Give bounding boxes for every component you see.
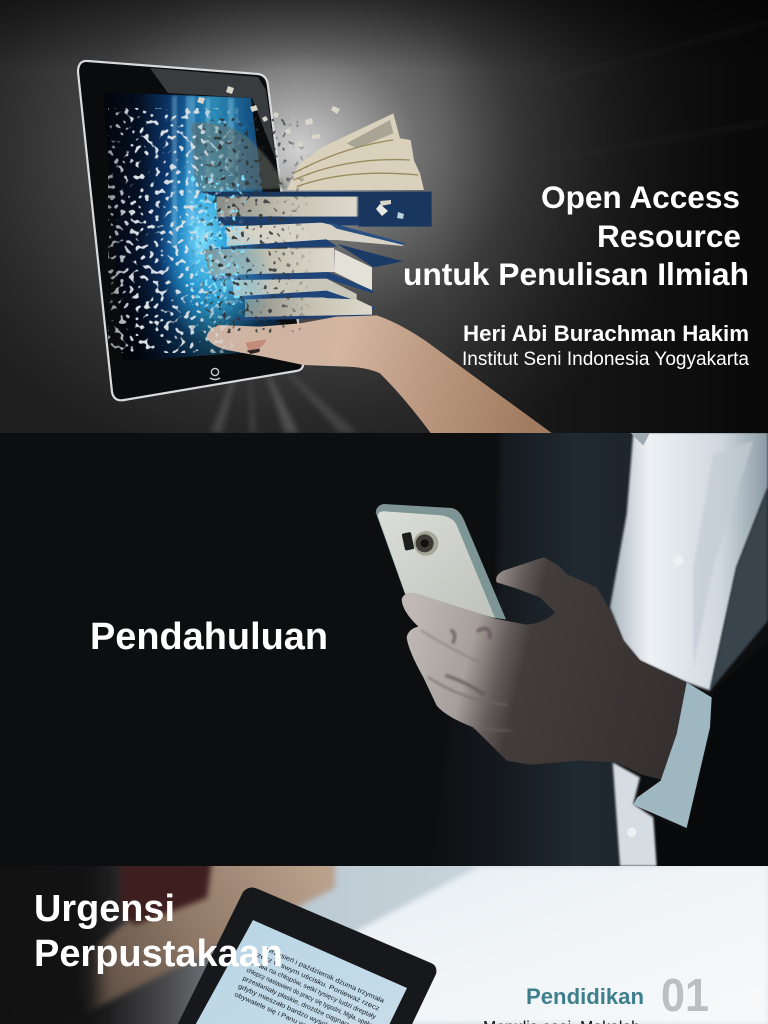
reader text: [233, 942, 385, 1024]
home button: [210, 368, 220, 380]
shirt lower: [613, 762, 657, 866]
shirt buttons: [627, 556, 683, 837]
title: Resource: [597, 218, 741, 254]
reader text: działa na chłopów, setki tysięcy ludzi dreptały: [250, 959, 377, 1021]
white desk surface: [330, 866, 768, 1024]
collar: [630, 432, 650, 446]
book two: [227, 223, 403, 246]
data particles: cyan: [190, 175, 245, 305]
left dark shadow: [0, 856, 98, 1024]
panel: pendahuluan slide: [0, 427, 768, 874]
photo: man with phone: [376, 427, 768, 874]
background: blurred desk: [0, 866, 768, 1024]
shirt fold: [693, 441, 753, 667]
heading: Urgensi: [34, 888, 175, 930]
tablet body: [78, 61, 303, 400]
title: [404, 186, 748, 286]
heading: [34, 888, 283, 975]
data particles: light: [108, 108, 248, 353]
camera: [402, 532, 414, 551]
title: untuk Penulisan Ilmiah: [403, 256, 749, 292]
reader text: wrzesień i październik dżuma trzymała: [264, 946, 385, 1005]
number: 01: [661, 969, 709, 1021]
hand and arm: [207, 315, 557, 437]
category label: Pendidikan: [526, 984, 644, 1009]
screen shading: [119, 94, 279, 361]
title: Open Access: [541, 179, 740, 215]
author institution: Institut Seni Indonesia Yogyakarta: [462, 349, 749, 370]
left pages dissolving: [192, 122, 287, 192]
finger shading: [422, 628, 510, 731]
jacket and tie: [472, 433, 634, 866]
open book: [192, 113, 424, 192]
phone: [376, 504, 506, 619]
book four: [210, 272, 373, 293]
shirt upper: [610, 432, 768, 691]
shirt cuff: [633, 682, 712, 828]
panel: urgensi perpustakaan slide: [0, 856, 768, 1024]
book three: [203, 248, 334, 275]
right pages: [287, 113, 424, 190]
hand: [402, 557, 687, 781]
tablet screen: [103, 92, 282, 361]
fingernail: [246, 340, 266, 350]
background: spotlight gradient: [0, 0, 768, 433]
icon: e-reader: [160, 888, 436, 1024]
reader body: [160, 888, 436, 1024]
reader screen: [176, 920, 407, 1024]
book one: [200, 192, 432, 227]
screen glow: [160, 158, 240, 334]
glass reflection: [150, 68, 276, 160]
book stack: [200, 192, 432, 321]
author name: Heri Abi Burachman Hakim: [463, 321, 749, 346]
icon: tablet: [78, 61, 303, 400]
background: dark: [0, 433, 768, 866]
jacket lapel right: [710, 487, 768, 691]
brown table block: [78, 860, 335, 1014]
panel: title slide: [0, 0, 768, 437]
screen light streaks: [172, 96, 234, 246]
book five: [245, 297, 372, 319]
light rays: [210, 376, 355, 433]
flying scraps: [197, 86, 404, 219]
reader text: rzecz w swym uścisku. Ponieważ rzecz: [253, 951, 380, 1013]
heading: Perpustakaan: [34, 933, 283, 975]
cyan glow on books: [200, 229, 270, 326]
jacket lower right: [653, 641, 768, 866]
heading: Pendahuluan: [90, 616, 328, 658]
dark red object: [120, 860, 212, 925]
data particles: dark: [188, 118, 313, 333]
